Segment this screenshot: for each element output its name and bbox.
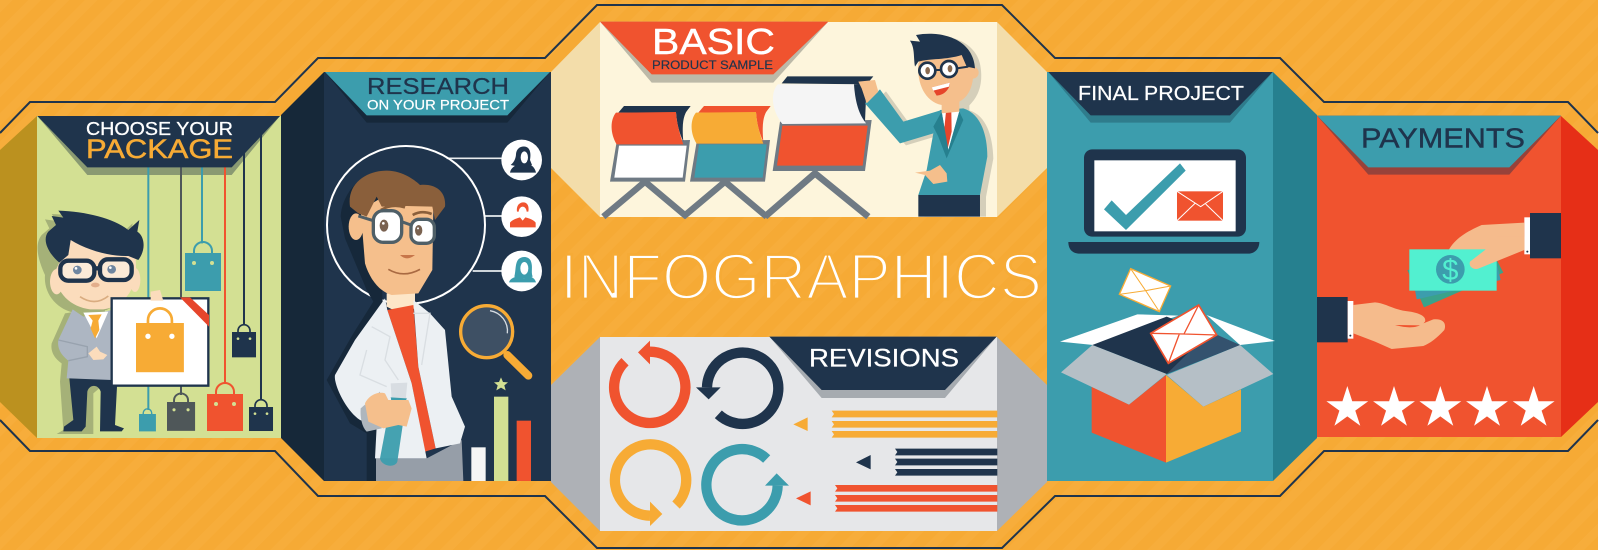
scientist shadow: [327, 172, 383, 481]
orange text lines: [793, 411, 997, 438]
man: shirt and tie: [83, 312, 108, 338]
icon: gray bag: [167, 393, 195, 431]
giving hand: [1448, 213, 1561, 258]
banner shadow: [600, 22, 828, 83]
heading: basic: BASIC: [652, 21, 775, 62]
banknotes: $: [1442, 254, 1458, 287]
icon: orange cycle arrow: [615, 444, 686, 526]
heading: research: RESEARCH: [367, 73, 509, 99]
heading: payments: PAYMENTS: [1361, 122, 1525, 154]
banner: [1048, 72, 1273, 115]
heading: on your project: ON YOUR PROJECT: [367, 96, 509, 112]
character shadow: [38, 214, 136, 434]
man: hand: [88, 347, 107, 360]
banner shadow: [1048, 72, 1273, 123]
heading: revisions: REVISIONS: [809, 344, 959, 372]
board 1: [603, 106, 691, 217]
outline: top contour: [0, 5, 1598, 133]
avatar: teal woman: [501, 251, 542, 291]
scientist: hand: [365, 393, 412, 428]
banner: [1317, 116, 1561, 167]
panel: final project: [1047, 72, 1317, 481]
icon: red bag: [207, 383, 243, 431]
presenter: arm: [865, 89, 942, 143]
banknotes: [1407, 249, 1503, 307]
icon: navy hanging bag: [232, 325, 256, 357]
scientist: glasses: [373, 211, 402, 242]
presenter shadow: [871, 36, 993, 217]
icon: laptop: [1068, 149, 1259, 254]
presenter: face: [918, 53, 973, 113]
banner shadow: [769, 337, 997, 398]
icon: envelope in box: [1151, 305, 1217, 363]
scientist: lab coat: [335, 298, 427, 458]
scientist: ear: [349, 213, 363, 240]
bar chart: [471, 377, 531, 481]
man: hair: [46, 211, 144, 263]
scientist: cuff: [361, 392, 382, 432]
red text lines: [796, 485, 997, 512]
connector lines: [447, 158, 503, 271]
sign board: [112, 298, 208, 386]
panel: choose your package: [0, 116, 281, 438]
avatar: red man: [501, 196, 542, 237]
presenter: mouth: [932, 83, 950, 96]
presenter: trousers: [918, 195, 980, 217]
icon: flying envelope: [1119, 269, 1171, 312]
man: glasses: [60, 261, 94, 281]
scientist: trousers: [376, 440, 463, 481]
heading: package: PACKAGE: [86, 134, 233, 164]
icon: teal hanging bag: [185, 242, 221, 291]
presenter: glasses: [919, 63, 935, 79]
board 3: [765, 76, 873, 217]
banner shadow: [325, 72, 550, 123]
avatar: navy woman: [501, 140, 542, 180]
test tube: [380, 383, 407, 466]
panel: revisions: [551, 337, 1047, 531]
outline: bottom contour: [0, 420, 1598, 548]
title: INFOGRAPHICS: [560, 240, 1042, 313]
heading: final project: FINAL PROJECT: [1078, 83, 1244, 105]
heading: choose your: CHOOSE YOUR: [86, 118, 233, 139]
banner: [37, 116, 280, 167]
giving thumb: [1470, 237, 1524, 269]
banner: [325, 72, 550, 115]
panel: payments: [1317, 116, 1598, 437]
icon: small teal bag: [139, 409, 156, 431]
navy text lines: [856, 449, 997, 476]
icon: bag on sign: [136, 308, 184, 372]
five star rating: [1326, 386, 1555, 426]
panel: basic product sample: [551, 21, 1047, 217]
banner: [769, 337, 997, 390]
board 2: [683, 106, 771, 217]
banner: [600, 22, 828, 74]
presenter: hair: [910, 34, 975, 68]
scientist: neck and shirt: [387, 292, 415, 313]
hanging strings: [148, 133, 261, 410]
receiving hand: [1317, 297, 1445, 349]
scientist: hair: [350, 171, 445, 220]
banner shadow: [1317, 116, 1561, 175]
presenter: jacket: [918, 108, 987, 195]
circle frame: [327, 146, 485, 304]
man: jacket: [58, 309, 112, 381]
icon: open box: [1060, 314, 1275, 463]
panel: research on your project: [281, 72, 551, 481]
man: ears: [50, 269, 63, 294]
presenter: hands: [915, 165, 947, 184]
man: trousers: [63, 378, 124, 431]
icon: navy cycle arrow: [696, 353, 778, 424]
icon: magnifier: [461, 306, 528, 376]
icon: small navy bag: [249, 400, 273, 431]
icon: red cycle arrow: [614, 341, 685, 423]
scientist: face: [361, 197, 433, 295]
heading: product sample: PRODUCT SAMPLE: [652, 60, 773, 72]
icon: teal cycle arrow: [706, 449, 789, 520]
man: face: [55, 240, 136, 309]
banner shadow: [37, 116, 280, 175]
